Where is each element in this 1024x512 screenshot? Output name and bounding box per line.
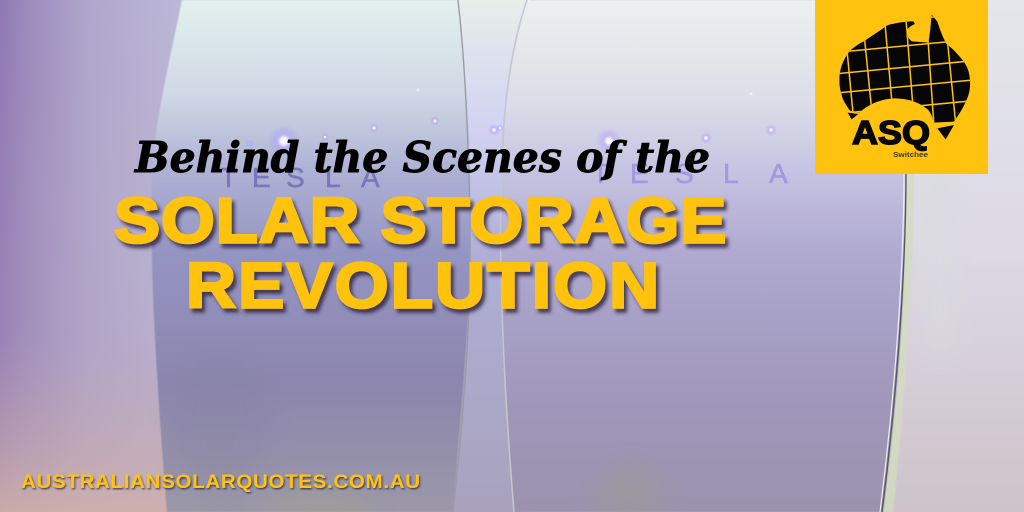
logo background	[815, 0, 988, 174]
Tesla wordmark right: TESLA	[592, 158, 788, 189]
right battery unit	[500, 0, 906, 512]
right wall	[880, 0, 1024, 512]
ASQ logo	[815, 0, 988, 174]
status lights	[246, 88, 777, 157]
gap between units	[450, 0, 530, 512]
icon: Tasmania	[937, 125, 954, 139]
left wall	[0, 0, 190, 512]
logo sub-brand: Switchee	[893, 150, 928, 159]
left battery unit	[151, 0, 470, 512]
panel tone patch: right unit	[595, 466, 665, 512]
logo letters: ASQ	[852, 114, 930, 151]
unit edge lines	[453, 0, 906, 512]
title	[114, 186, 726, 322]
title line 2: REVOLUTION	[186, 251, 659, 322]
title line 1: SOLAR STORAGE	[114, 186, 726, 257]
icon: small left triangle	[848, 113, 858, 119]
Tesla wordmark left: TESLA	[220, 162, 380, 193]
website URL: AUSTRALIANSOLARQUOTES.COM.AU	[21, 471, 420, 493]
panel tone patch: lower left	[170, 350, 270, 490]
green reflection beside right unit	[883, 170, 914, 512]
panel tone patch: bottom centre	[263, 492, 373, 512]
icon: Australia solar panel map	[839, 14, 970, 140]
subtitle: Behind the Scenes of the	[134, 133, 710, 182]
